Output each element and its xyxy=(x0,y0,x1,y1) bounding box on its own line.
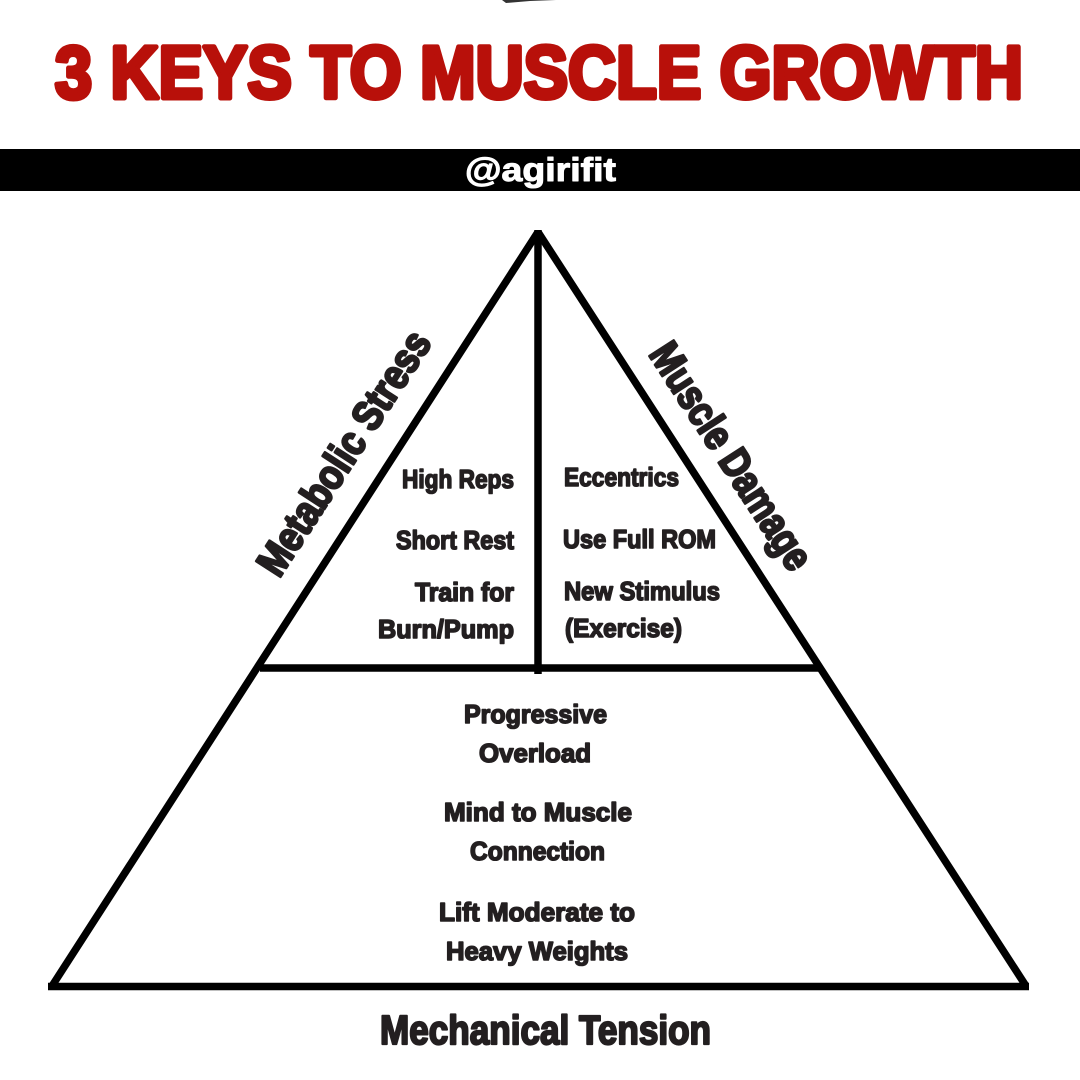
list: mechanical tension methods: Connection xyxy=(470,836,605,866)
list: metabolic stress methods: Train for xyxy=(415,577,514,607)
side label: Metabolic Stress: Metabolic Stress xyxy=(247,322,440,584)
list: mechanical tension methods: Progressive xyxy=(464,699,607,729)
list: mechanical tension methods: Heavy Weights xyxy=(446,936,628,966)
base label: Mechanical Tension: Mechanical Tension xyxy=(380,1007,711,1053)
list: metabolic stress methods: Burn/Pump xyxy=(378,614,514,644)
handle banner xyxy=(0,149,1080,191)
handle banner: @agirifit xyxy=(465,151,616,188)
list: metabolic stress methods: Short Rest xyxy=(396,525,514,555)
list: muscle damage methods: (Exercise) xyxy=(565,613,682,643)
list: muscle damage methods xyxy=(563,462,720,643)
list: muscle damage methods: Eccentrics xyxy=(564,462,679,492)
list: mechanical tension methods: Mind to Muscle xyxy=(444,797,632,827)
cropped dark shape at top edge xyxy=(502,0,556,3)
list: muscle damage methods: Use Full ROM xyxy=(563,524,716,554)
side label: Muscle Damage: Muscle Damage xyxy=(640,333,823,579)
list: mechanical tension methods xyxy=(439,699,635,966)
list: metabolic stress methods xyxy=(378,464,514,644)
list: metabolic stress methods: High Reps xyxy=(402,464,514,494)
list: muscle damage methods: New Stimulus xyxy=(564,576,720,606)
list: mechanical tension methods: Overload xyxy=(479,738,591,768)
list: mechanical tension methods: Lift Moderate to xyxy=(439,897,635,927)
pyramid diagram xyxy=(48,230,1029,986)
